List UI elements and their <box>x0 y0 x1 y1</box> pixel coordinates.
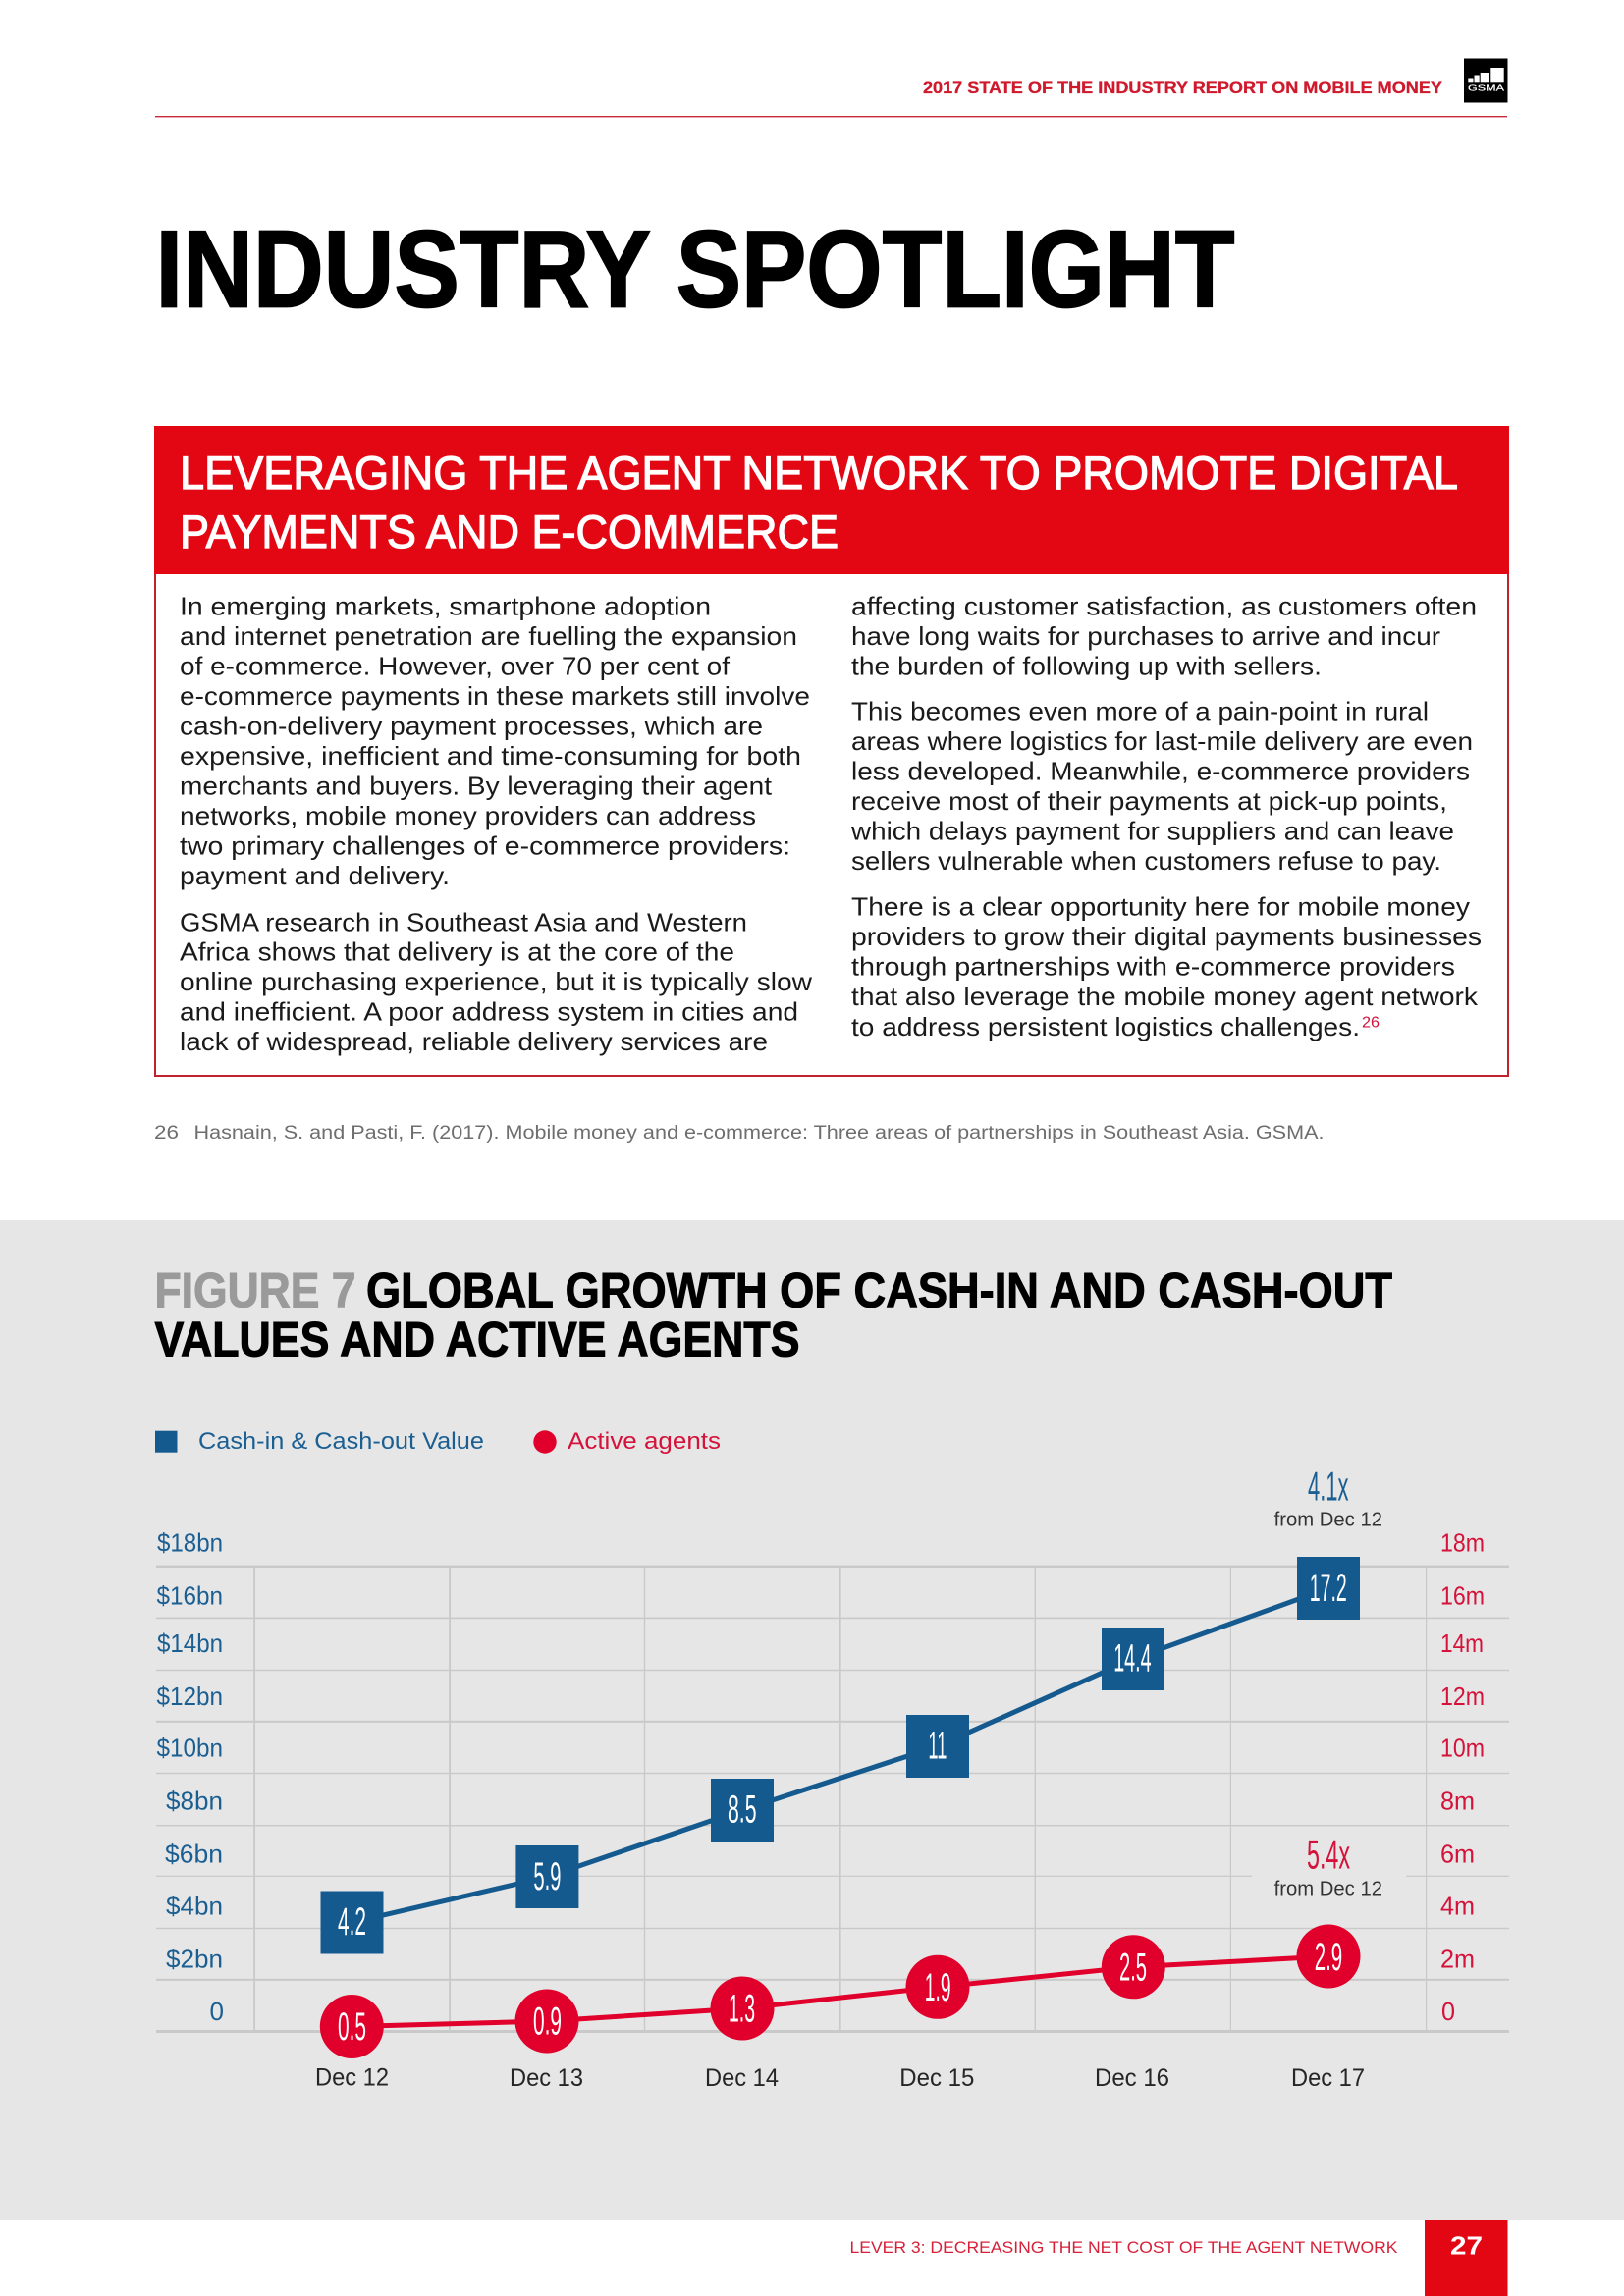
right column text: the burden of following up with sellers. <box>851 652 1322 681</box>
footnote: Hasnain, S. and Pasti, F. (2017). Mobile money and e-commerce: Three areas of partnerships in Southeast Asia. GSMA. <box>194 1123 1324 1144</box>
right axis labels: 14m <box>1440 1629 1484 1658</box>
left column text: and inefficient. A poor address system in cities and <box>180 997 798 1027</box>
right axis labels: 2m <box>1440 1945 1475 1974</box>
series: cash-in and cash-out value: 5.9 <box>533 1855 561 1898</box>
left axis labels: $12bn <box>157 1682 223 1711</box>
series: cash-in and cash-out value: 4.2 <box>338 1900 366 1944</box>
left column text: networks, mobile money providers can address <box>180 801 756 830</box>
series: active agents: 1.3 <box>729 1987 755 2030</box>
left column text: Africa shows that delivery is at the core of the <box>180 937 734 967</box>
callout: agent growth 5.4x <box>1274 1831 1382 1900</box>
right column text: that also leverage the mobile money agent network <box>851 982 1479 1011</box>
left axis labels: $8bn <box>166 1787 223 1816</box>
footer section title: LEVER 3: DECREASING THE NET COST OF THE AGENT NETWORK <box>850 2238 1398 2257</box>
series: cash-in and cash-out value: 8.5 <box>728 1788 756 1831</box>
x axis labels: Dec 14 <box>705 2064 779 2092</box>
series: active agents: 2.5 <box>1119 1946 1147 1989</box>
panel: figure 7 <box>0 1220 1624 2220</box>
x axis labels: Dec 15 <box>899 2064 974 2092</box>
right column text: areas where logistics for last-mile delivery are even <box>851 726 1473 756</box>
x axis labels: Dec 16 <box>1095 2064 1169 2092</box>
footnote: 26 <box>154 1123 179 1144</box>
right axis labels: 12m <box>1440 1682 1485 1711</box>
left axis labels <box>157 1527 224 2026</box>
line chart <box>156 1463 1509 2092</box>
left column text: online purchasing experience, but it is typically slow <box>180 967 812 996</box>
callout: value growth 4.1x: from Dec 12 <box>1274 1509 1382 1531</box>
series: active agents <box>320 1924 1360 2058</box>
right column text: This becomes even more of a pain-point in rural <box>851 696 1429 725</box>
right column text: which delays payment for suppliers and can leave <box>850 817 1454 846</box>
left column text: payment and delivery. <box>180 861 450 890</box>
panel: agent network spotlight box <box>154 426 1509 1076</box>
left column text <box>180 592 812 1056</box>
figure heading: GLOBAL GROWTH OF CASH-IN AND CASH-OUT <box>366 1263 1392 1318</box>
running header text: 2017 STATE OF THE INDUSTRY REPORT ON MOBILE MONEY <box>923 79 1443 97</box>
x axis labels <box>315 2063 1365 2092</box>
left axis labels: $4bn <box>166 1892 223 1921</box>
right axis labels: 18m <box>1440 1527 1485 1557</box>
left column text: two primary challenges of e-commerce providers: <box>180 831 790 861</box>
right axis labels: 16m <box>1440 1580 1485 1610</box>
callout: agent growth 5.4x: from Dec 12 <box>1274 1877 1382 1900</box>
right column text: sellers vulnerable when customers refuse to pay. <box>851 846 1441 876</box>
right column text: 26 <box>1362 1015 1380 1032</box>
figure heading <box>155 1263 1392 1367</box>
callout: value growth 4.1x: 4.1x <box>1308 1463 1349 1509</box>
panel heading banner: LEVERAGING THE AGENT NETWORK TO PROMOTE DIGITAL <box>180 447 1458 499</box>
page number <box>1425 2220 1508 2296</box>
callout: value growth 4.1x <box>1274 1463 1382 1531</box>
series: cash-in and cash-out value: 17.2 <box>1310 1567 1347 1610</box>
right column text: less developed. Meanwhile, e-commerce providers <box>851 756 1470 785</box>
series: cash-in and cash-out value <box>320 1557 1360 1953</box>
left column text: In emerging markets, smartphone adoption <box>180 592 711 621</box>
right column text: receive most of their payments at pick-up points, <box>851 786 1447 816</box>
series: cash-in and cash-out value: 11 <box>928 1725 947 1768</box>
right column text: There is a clear opportunity here for mobile money <box>851 892 1470 922</box>
left axis labels: $14bn <box>157 1629 223 1658</box>
right axis labels: 8m <box>1440 1787 1475 1816</box>
left column text: cash-on-delivery payment processes, which are <box>180 712 763 741</box>
right axis labels: 0 <box>1441 1997 1455 2026</box>
left axis labels: $18bn <box>157 1527 223 1557</box>
left column text: lack of widespread, reliable delivery services are <box>180 1027 768 1056</box>
right axis labels: 6m <box>1440 1840 1475 1869</box>
left column text: GSMA research in Southeast Asia and Western <box>180 907 747 936</box>
panel heading banner: PAYMENTS AND E-COMMERCE <box>180 506 839 558</box>
x axis labels: Dec 12 <box>315 2063 389 2091</box>
right column text: to address persistent logistics challenges. <box>851 1012 1360 1041</box>
series: active agents: 2.9 <box>1315 1936 1342 1979</box>
right column text: affecting customer satisfaction, as customers often <box>851 592 1477 621</box>
page number: 27 <box>1450 2231 1483 2261</box>
callout: agent growth 5.4x: 5.4x <box>1307 1831 1350 1877</box>
series: active agents: 1.9 <box>925 1966 951 2009</box>
left axis labels: $6bn <box>165 1840 223 1869</box>
figure heading: FIGURE 7 <box>155 1263 355 1318</box>
left column text: and internet penetration are fuelling the expansion <box>180 621 797 651</box>
x axis labels: Dec 13 <box>510 2064 583 2092</box>
left axis labels: 0 <box>210 1997 224 2026</box>
legend: cash-in and cash-out value: Cash-in & Cash-out Value <box>198 1428 484 1455</box>
page footer <box>850 2220 1508 2296</box>
right column text: through partnerships with e-commerce providers <box>851 952 1455 982</box>
panel heading banner <box>154 426 1509 574</box>
left axis labels: $2bn <box>166 1945 223 1974</box>
left axis labels: $10bn <box>157 1734 223 1763</box>
series: cash-in and cash-out value: 14.4 <box>1113 1636 1152 1680</box>
left column text: of e-commerce. However, over 70 per cent of <box>180 652 731 681</box>
right axis labels: 10m <box>1440 1734 1485 1763</box>
left axis labels: $16bn <box>157 1580 223 1610</box>
legend: active agents: Active agents <box>568 1428 721 1455</box>
left column text: e-commerce payments in these markets still involve <box>180 681 810 711</box>
page header <box>155 59 1508 117</box>
figure heading: VALUES AND ACTIVE AGENTS <box>155 1312 799 1367</box>
series: active agents: 0.9 <box>533 2001 562 2044</box>
left column text: merchants and buyers. By leveraging their agent <box>180 772 773 801</box>
chart legend <box>155 1428 721 1455</box>
icon: GSMA logo <box>1464 59 1508 102</box>
right column text: have long waits for purchases to arrive and incur <box>851 621 1440 651</box>
right column text <box>850 592 1482 1041</box>
right axis labels <box>1440 1527 1485 2026</box>
page title: INDUSTRY SPOTLIGHT <box>155 208 1235 330</box>
right column text: providers to grow their digital payments businesses <box>851 922 1482 951</box>
series: active agents: 0.5 <box>338 2005 366 2049</box>
right axis labels: 4m <box>1440 1892 1475 1921</box>
x axis labels: Dec 17 <box>1291 2064 1365 2092</box>
left column text: expensive, inefficient and time-consuming for both <box>180 741 801 771</box>
icon: GSMA logo: GSMA <box>1468 82 1504 92</box>
